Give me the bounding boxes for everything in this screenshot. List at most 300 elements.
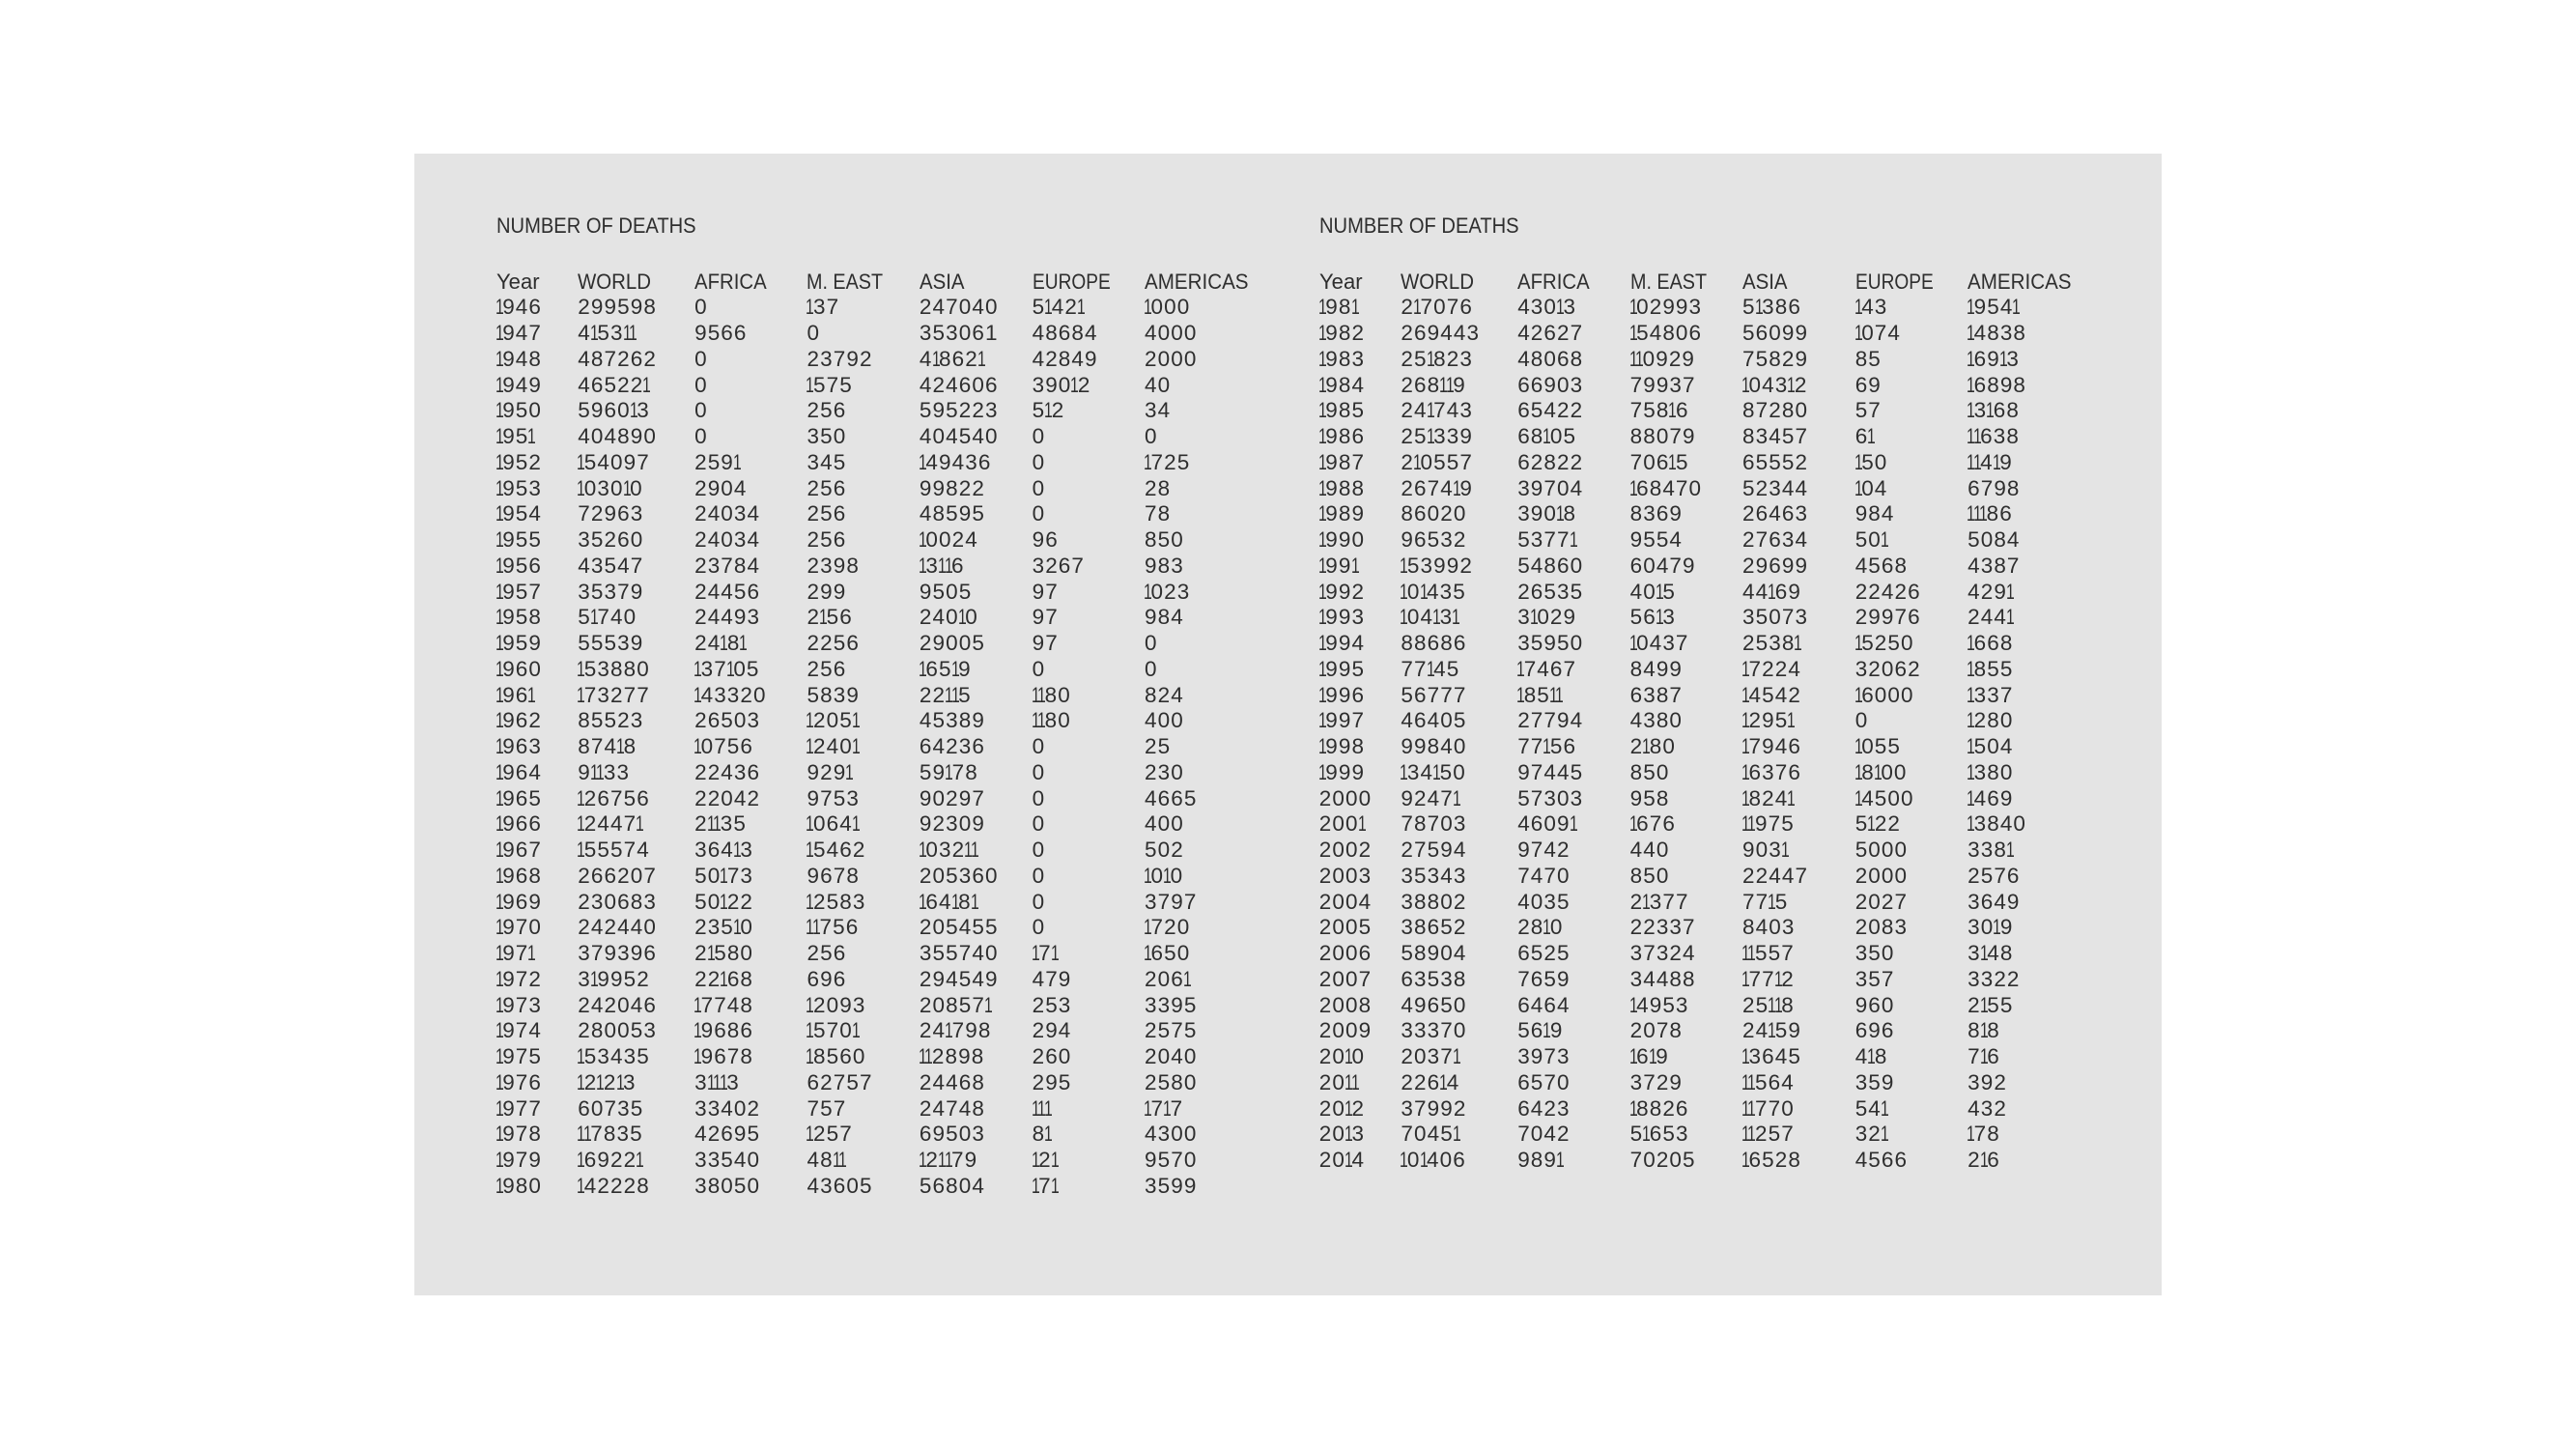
right table data rows: 985 [1325,398,1365,422]
left table data rows: 1 [971,838,978,862]
right table data rows: 63538 [1401,967,1466,991]
right table data rows: 2 7076 [1401,295,1473,319]
left table data rows: 1 [919,657,927,681]
right table data rows: 6423 [1517,1095,1571,1121]
left table data rows: 1 [938,1148,947,1172]
left table data rows: 9678 [807,864,860,888]
right table data rows: 1 [1787,373,1796,396]
right table column headers: EUROPE [1855,269,1933,294]
right table data rows: 1 [2006,605,2015,629]
left table data rows: 1 [527,424,536,448]
right table data rows: 1 [1967,786,1975,810]
right table data rows: 903 [1742,838,1782,862]
right table data rows: 2674 9 [1401,475,1473,500]
left table data rows: 970 [502,915,542,939]
right table data rows: 1 [1881,1122,1889,1146]
left table data rows: 1 [495,657,503,681]
left table data rows: 72963 [578,501,643,526]
right table data rows: 68 05 [1517,424,1576,448]
left table data rows: 1 [495,321,503,345]
left table data rows: 1 [713,1070,722,1094]
right table data rows: 1 [1400,605,1408,629]
right table data rows: 1 [1741,967,1750,991]
right table data rows: 380 [1974,760,2013,784]
right table data rows: 99 [1325,554,1352,578]
right table data rows: 1 [1980,993,1988,1016]
right table data rows: 75829 [1742,347,1808,371]
right table data rows: 1 [1629,347,1637,371]
right table data rows: 1 [1973,450,1981,474]
right table data rows: 96532 [1401,527,1466,552]
right table data rows: 26535 [1517,580,1583,603]
right table data rows: 1 [1570,811,1577,836]
right table data rows: 1 [1543,915,1551,939]
left table data rows: 1 [577,1174,585,1198]
right table data rows: 50 [1855,527,1882,552]
left table data rows: 230683 [578,889,657,914]
left table data rows: 2447 [584,811,637,836]
left table data rows: 97 [1033,605,1059,629]
left table data rows: 1 [977,347,986,371]
right table data rows: 1 [1629,475,1637,500]
right table data rows: 87280 [1742,398,1808,422]
left table data rows: 45389 [920,708,985,732]
right table data rows: 1 [1318,657,1327,681]
left table data rows: 259 [694,450,734,474]
left table data rows: 9686 [701,1018,753,1042]
right table data rows [1318,295,2026,1172]
left table data rows: 1 [577,838,585,862]
left table data rows: 1 [1144,941,1152,965]
left table data rows: 824 [1145,682,1184,707]
right table data rows: 37324 [1630,941,1696,965]
right table data rows: 1 [1755,295,1763,319]
left table data rows: 976 [502,1070,542,1094]
right table data rows: 987 [1325,450,1365,474]
left table data rows: 962 [502,708,542,732]
left table data rows: 948 [502,347,542,371]
left table data rows: 7 7 [1150,1095,1183,1121]
right table data rows: 35073 [1742,605,1808,629]
left table data rows: 1 [1051,1148,1059,1172]
right table data rows: 6525 [1517,941,1571,965]
right table data rows: 2005 [1319,915,1372,939]
right table data rows: 2008 [1319,993,1372,1016]
left table data rows: 299 [807,580,846,603]
right table data rows: 7045 [1401,1122,1454,1146]
left table data rows: 1 [596,1070,605,1094]
left table data rows: 97 [1033,631,1059,655]
right table data rows: 37992 [1401,1095,1466,1121]
left table data rows: 1 [495,1070,503,1094]
left table data rows: 7 [1038,1174,1052,1198]
right table data rows: 1 [1967,321,1975,345]
left table data rows: 1 [1032,1174,1039,1198]
right table data rows: 1 [1318,605,1327,629]
right table data rows: 993 [1325,605,1365,629]
right table data rows: 1 [1452,605,1460,629]
right table data rows: 20 [1319,1070,1345,1094]
left table data rows: 1 [495,838,503,862]
left table data rows: 1 [623,321,631,345]
left table data rows: 50 22 [694,889,753,914]
left table data rows: 59 78 [920,760,978,784]
right table data rows: 1 [1854,786,1862,810]
right table data rows: 8403 [1742,915,1795,939]
right table data rows: 668 [1974,631,2013,655]
left table data rows: 205455 [920,915,999,939]
right table data rows: 1 [1556,1148,1565,1172]
right table data rows: 1 [1318,373,1327,396]
left table data rows: 1 [1070,373,1079,396]
left table data rows: 23792 [807,347,873,371]
right table data rows: 62822 [1517,450,1583,474]
right table column headers: AMERICAS [1967,269,2072,294]
left table data rows: 1 [495,967,503,991]
left table data rows: 030 0 [584,475,643,500]
right table data rows: 77 5 [1742,889,1788,914]
right table data rows: 1 [1741,1070,1750,1094]
left table data rows: 8 [1033,1122,1045,1146]
left table data rows: 725 [1150,450,1190,474]
left table data rows: 1 [1044,398,1053,422]
left table data rows: 1 [945,760,953,784]
left table data rows: 1 [590,760,599,784]
left table column headers [496,269,1249,294]
left table data rows: 3267 [1033,554,1085,578]
left table data rows: 1 [713,811,722,836]
left table data rows: 24034 [694,527,760,552]
left table data rows: 345 [807,450,846,474]
left table data rows: 1 [694,682,702,707]
left table data rows: 0 [807,321,820,345]
right table data rows: 429 [1967,580,2007,603]
left table data rows: 978 [502,1122,542,1146]
left table data rows: 1 [852,1018,861,1042]
left table data rows: 1 [1032,1148,1039,1172]
right table data rows: 1 [1854,631,1862,655]
left table data rows: 97 [502,941,528,965]
left table data rows: 1 [495,708,503,732]
right table data rows: 56 3 [1630,605,1676,629]
right table data rows: 1 [1432,760,1441,784]
left table data rows: 379396 [578,941,657,965]
left table data rows: 38050 [694,1174,760,1198]
right table data rows: 3729 [1630,1070,1683,1094]
left table data rows: 23784 [694,554,760,578]
right table data rows: 1 [1741,682,1750,707]
right table data rows: 20 4 [1319,1148,1365,1172]
right table data rows: 1 [1635,347,1644,371]
left table data rows: 1 [919,527,927,552]
right table data rows: 226 4 [1401,1070,1459,1094]
left table data rows: 266207 [578,864,657,888]
right table data rows: 77 56 [1517,734,1576,758]
left table data rows: 64236 [920,734,985,758]
right table data rows: 32 [1855,1122,1882,1146]
right table data rows: 337 [1974,682,2013,707]
right table data rows: 1 [1874,760,1882,784]
left table data rows: 974 [502,1018,542,1042]
right table data rows: 1 [1400,554,1408,578]
left table data rows: 1 [806,1018,814,1042]
right table data rows: 1 [1318,424,1327,448]
right table data rows: 994 [1325,631,1365,655]
left table data rows: 235 0 [694,915,753,939]
left table data rows: 968 [502,864,542,888]
left table data rows: 1 [1144,450,1152,474]
right table data rows: 7042 [1517,1122,1571,1146]
right table data rows: 52344 [1742,475,1808,500]
left table data rows: 1 [838,1148,847,1172]
left table data rows: 1 [984,993,993,1016]
right table data rows: 986 [1325,424,1365,448]
table: deaths 1946-1980 [495,269,1249,1198]
right table data rows: 244 [1967,605,2007,629]
right table data rows: 3 029 [1517,605,1576,629]
right table data rows: 1 [1656,605,1664,629]
left table data rows: 1 [577,1070,585,1094]
right table data rows: 1 [1980,1018,1988,1042]
right table data rows: 1 [1420,580,1428,603]
left table data rows: 60735 [578,1095,643,1121]
right table data rows: 2 6 [1967,1148,2000,1172]
left table data rows: 1 [945,1018,953,1042]
left table data rows: 1 [806,295,814,319]
left table data rows: 1 [495,1148,503,1172]
left table data rows: 0 [1145,631,1158,655]
right table data rows: 1 [1967,657,1975,681]
right table data rows: 56099 [1742,321,1808,345]
left table data rows: 4665 [1145,786,1197,810]
left table data rows: 1 [733,450,742,474]
left table data rows: 0 [1033,501,1045,526]
right table data rows: 1 [1318,682,1327,707]
left table data rows: 5 2 [1033,398,1064,422]
right table data rows: 1 [1318,501,1327,526]
right table data rows: 34 50 [1407,760,1466,784]
left table data rows: 1 [945,682,953,707]
right table data rows: 1 [1629,811,1637,836]
left table data rows: 953 [502,475,542,500]
right table data rows: 280 [1974,708,2013,732]
left table data rows: 1 [707,941,715,965]
left table data rows: 1 [1077,295,1086,319]
left table data rows: 1 [1044,295,1053,319]
left table data rows: 1 [938,554,947,578]
left table data rows: 963 [502,734,542,758]
right table data rows: 1 [1453,1122,1461,1146]
right table data rows: 504 [1974,734,2013,758]
left table data rows: 355740 [920,941,999,965]
right table data rows: 4566 [1855,1148,1908,1172]
right table data rows: 04 3 [1407,605,1453,629]
left table data rows: 1 [951,889,959,914]
left table data rows: 929 [807,760,846,784]
left table data rows: 1 [495,295,503,319]
left table data rows: 1 [577,1122,585,1146]
left table data rows: 280053 [578,1018,657,1042]
left table data rows: 3395 [1145,993,1197,1016]
right table data rows: 29699 [1742,554,1808,578]
right table data rows: 3 68 [1974,398,2020,422]
right table data rows: 269443 [1401,321,1480,345]
left table data rows: 400 [1145,708,1184,732]
left table data rows: 1 [1144,1095,1152,1121]
left table data rows: 2040 [1145,1044,1197,1068]
right table data rows: 564 [1755,1070,1795,1094]
right table data rows: 1 [1516,682,1525,707]
right table data rows: 6570 [1517,1070,1571,1094]
right table data rows: 77 2 [1748,967,1795,991]
right table data rows: 1 [1741,1044,1750,1068]
left table data rows: 1 [1044,1095,1052,1121]
left table data rows: 49436 [925,450,991,474]
left table data rows: 1 [739,631,748,655]
left table data rows: 000 [1150,295,1190,319]
right table data rows: 996 [1325,682,1365,707]
left table data rows: 95 [502,424,528,448]
right table data rows: 1 [1747,941,1756,965]
left table data rows: 299598 [578,295,657,319]
right table data rows: 1 [1345,1095,1353,1121]
left table data rows: 1 [806,708,814,732]
right table data rows: 4387 [1967,554,2021,578]
left table data rows: 22 5 [920,682,972,707]
right table data rows: 02993 [1636,295,1702,319]
right table data rows: 824 [1748,786,1788,810]
right table data rows: 44 69 [1742,580,1801,603]
right table data rows: 2027 [1855,889,1908,914]
left table data rows: 48595 [920,501,985,526]
right table data rows: 338 [1967,838,2007,862]
right table data rows: 5084 [1967,527,2021,552]
right table data rows: 30 9 [1967,915,2013,939]
left table data rows: 757 [807,1095,846,1121]
right table data rows: 1 [1993,915,2001,939]
left table data rows: 0 [1033,450,1045,474]
right table data rows: 1 [1318,631,1327,655]
right table data rows: 975 [1755,811,1795,836]
right table data rows: 1 [1741,657,1750,681]
left table data rows: 1 [707,811,715,836]
left table data rows: 1 [720,631,728,655]
left table data rows: 1 [495,398,503,422]
right table data rows: 1 [1318,398,1327,422]
left table data rows: 1 [495,347,503,371]
right table data rows: 0437 [1636,631,1689,655]
left table data rows: 80 [1045,682,1071,707]
left table data rows: 0 [1145,657,1158,681]
right table data rows: 88686 [1401,631,1466,655]
left table data rows: 1 [919,1148,927,1172]
right table data rows: 6000 [1861,682,1914,707]
right table data rows: 38652 [1401,915,1466,939]
right table data rows: 20 0 [1319,1044,1365,1068]
left table data rows: 0024 [925,527,978,552]
right table data rows: 7659 [1517,967,1571,991]
left table data rows: 64 8 [925,889,972,914]
right table data rows: 469 [1974,786,2013,810]
left table data rows: 2 56 [807,605,853,629]
left table data rows: 96 [502,682,528,707]
left table data rows: 43547 [578,554,643,578]
right table data rows: 43 [1861,295,1887,319]
left table data rows: 964 [502,760,542,784]
right table data rows: 1 [1967,501,1975,526]
left table data rows: 977 [502,1095,542,1121]
left table data rows: 1 [733,915,742,939]
right table data rows: 6376 [1748,760,1801,784]
right table data rows: 999 [1325,760,1365,784]
right table data rows: 1 [1439,1070,1448,1094]
left table data rows: 2 79 [925,1148,977,1172]
left table data rows: 1 [1032,941,1039,965]
left table data rows: 99822 [920,475,985,500]
left table data rows: 1 [1144,864,1152,888]
left table data rows: 1 [583,1122,592,1146]
left table data rows: 1 [919,554,927,578]
right table data rows: 27794 [1517,708,1583,732]
right table data rows: 69 3 [1974,347,2020,371]
right table data rows: 25 8 [1742,993,1795,1016]
right table data rows: 1 [1318,295,1327,319]
left table data rows: 023 [1150,580,1190,603]
right table data rows: 1 [1967,811,1975,836]
table: deaths 1981-2014 [1318,269,2072,1172]
left table data rows: 1 [945,554,952,578]
panel: number of deaths tables [414,154,2162,1295]
left table data rows: 0 0 [1150,864,1183,888]
left table data rows: 1 [590,967,599,991]
right table data rows: 1 [1413,450,1422,474]
left table data rows: 1 [694,1018,702,1042]
right table data rows: 1 [1781,838,1790,862]
left table data rows: 487262 [578,347,657,371]
left table data rows: 1 [852,811,861,836]
right table data rows: 1 [1629,631,1637,655]
right table data rows: 4609 [1517,811,1571,836]
left table data rows: 350 [807,424,846,448]
left table data rows: 956 [502,554,542,578]
left table data rows: 064 [813,811,853,836]
left table data rows: 1 [495,915,503,939]
left table data rows: 37 05 [701,657,760,681]
left table data rows: 54097 [584,450,650,474]
right table data rows: 055 [1861,734,1901,758]
right table data rows: 1 [1318,475,1327,500]
left table data rows: 720 [1150,915,1190,939]
right table data rows: 1 [1649,1044,1656,1068]
left table data rows: 969 [502,889,542,914]
right table data rows: 2 80 [1630,734,1676,758]
right table data rows: 1 [1787,708,1796,732]
right table data rows: 5250 [1861,631,1914,655]
left table data rows: 46522 [578,373,643,396]
right table data rows: 5 22 [1855,811,1901,836]
left table data rows: 1 [616,1070,624,1094]
right table data rows: 53992 [1407,554,1473,578]
right table data rows: 83457 [1742,424,1808,448]
right table data rows: 22426 [1855,580,1921,603]
right table data rows: 1 [1318,708,1327,732]
left table data rows: 73277 [584,682,650,707]
right table data rows: 850 [1630,760,1669,784]
left table data rows: 240 [813,734,853,758]
left table data rows: 1 [495,786,503,810]
left table data rows: 1 [1032,708,1039,732]
left table data rows: 955 [502,527,542,552]
